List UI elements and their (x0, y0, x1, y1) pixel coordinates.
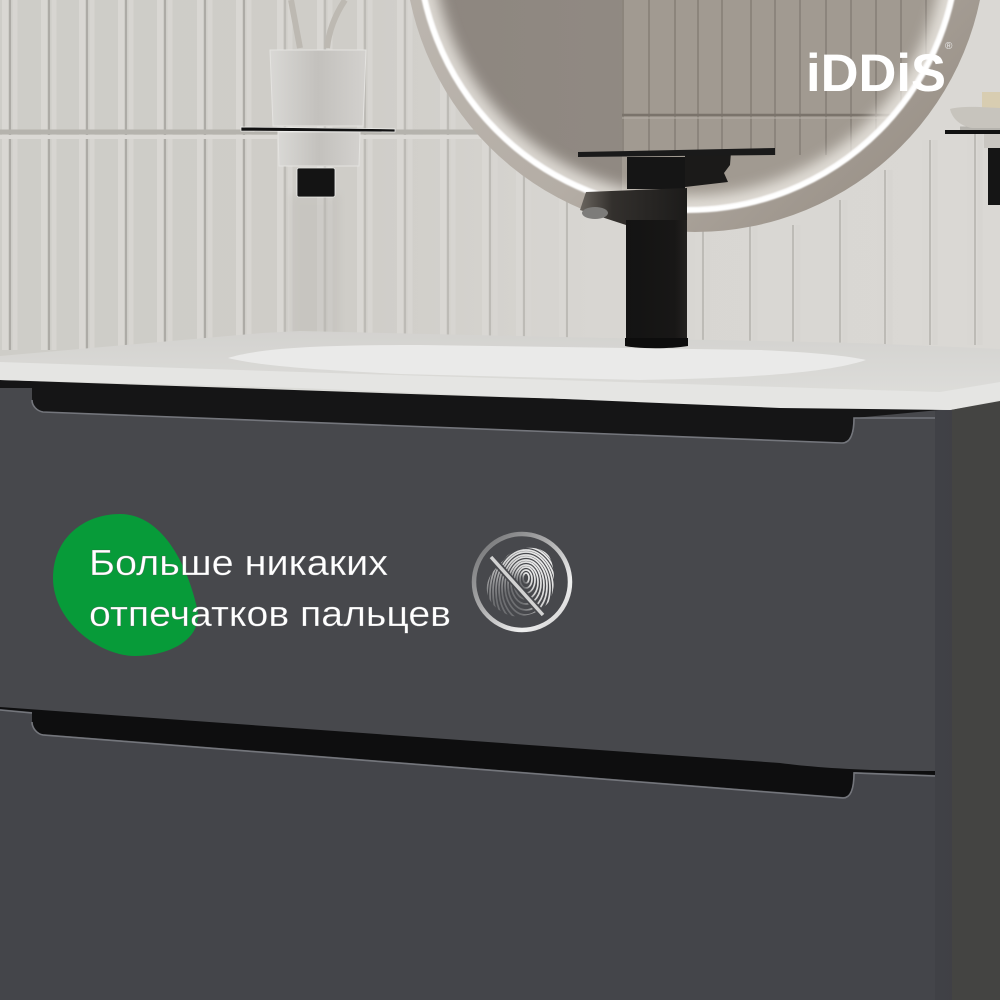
black wall bracket (297, 168, 335, 197)
faucet handle plate (578, 148, 775, 157)
faucet base (625, 338, 688, 348)
faucet (578, 148, 775, 348)
cabinet side panel (935, 395, 1000, 1000)
LED strip (418, 0, 958, 210)
glass shelf (241, 127, 395, 132)
basin bowl (228, 345, 866, 380)
soap dish (950, 107, 1000, 128)
soap bar (982, 92, 1000, 110)
faucet spout (580, 188, 687, 225)
registered mark: ® (945, 41, 953, 52)
toothbrushes (291, 0, 345, 48)
front lip of basin (0, 362, 1000, 410)
shelf (945, 130, 1000, 134)
caption text: Больше никаких (89, 542, 388, 583)
reflected tiles in mirror (427, 0, 949, 208)
caption text: отпечатков пальцев (89, 593, 451, 634)
right shelf with soap dish (945, 92, 1000, 205)
top drawer handle recess (0, 378, 960, 443)
glass tumbler holder (241, 0, 395, 197)
faucet aerator (582, 207, 608, 219)
caption text (89, 542, 451, 634)
fingerprint (486, 548, 554, 616)
bathroom cabinet body (0, 370, 1000, 1000)
lower drawer handle recess (0, 707, 935, 797)
faucet handle block (627, 157, 685, 189)
prohibition slash (491, 557, 543, 615)
tiled wall (0, 0, 1000, 360)
lower drawer (0, 709, 935, 1000)
white washbasin countertop (0, 331, 1000, 410)
bracket (988, 148, 1000, 205)
prohibition ring (474, 534, 570, 630)
iDDiS logo: iDDiS (806, 44, 946, 103)
round LED mirror (404, 0, 1000, 232)
frosted glass (270, 50, 366, 126)
faucet handle reflection (685, 152, 731, 187)
green blob accent (53, 514, 198, 656)
icon: crossed-out fingerprint (472, 532, 572, 632)
glass (984, 134, 1000, 148)
soft shadow below holder (290, 195, 340, 340)
faucet stem (626, 220, 687, 344)
